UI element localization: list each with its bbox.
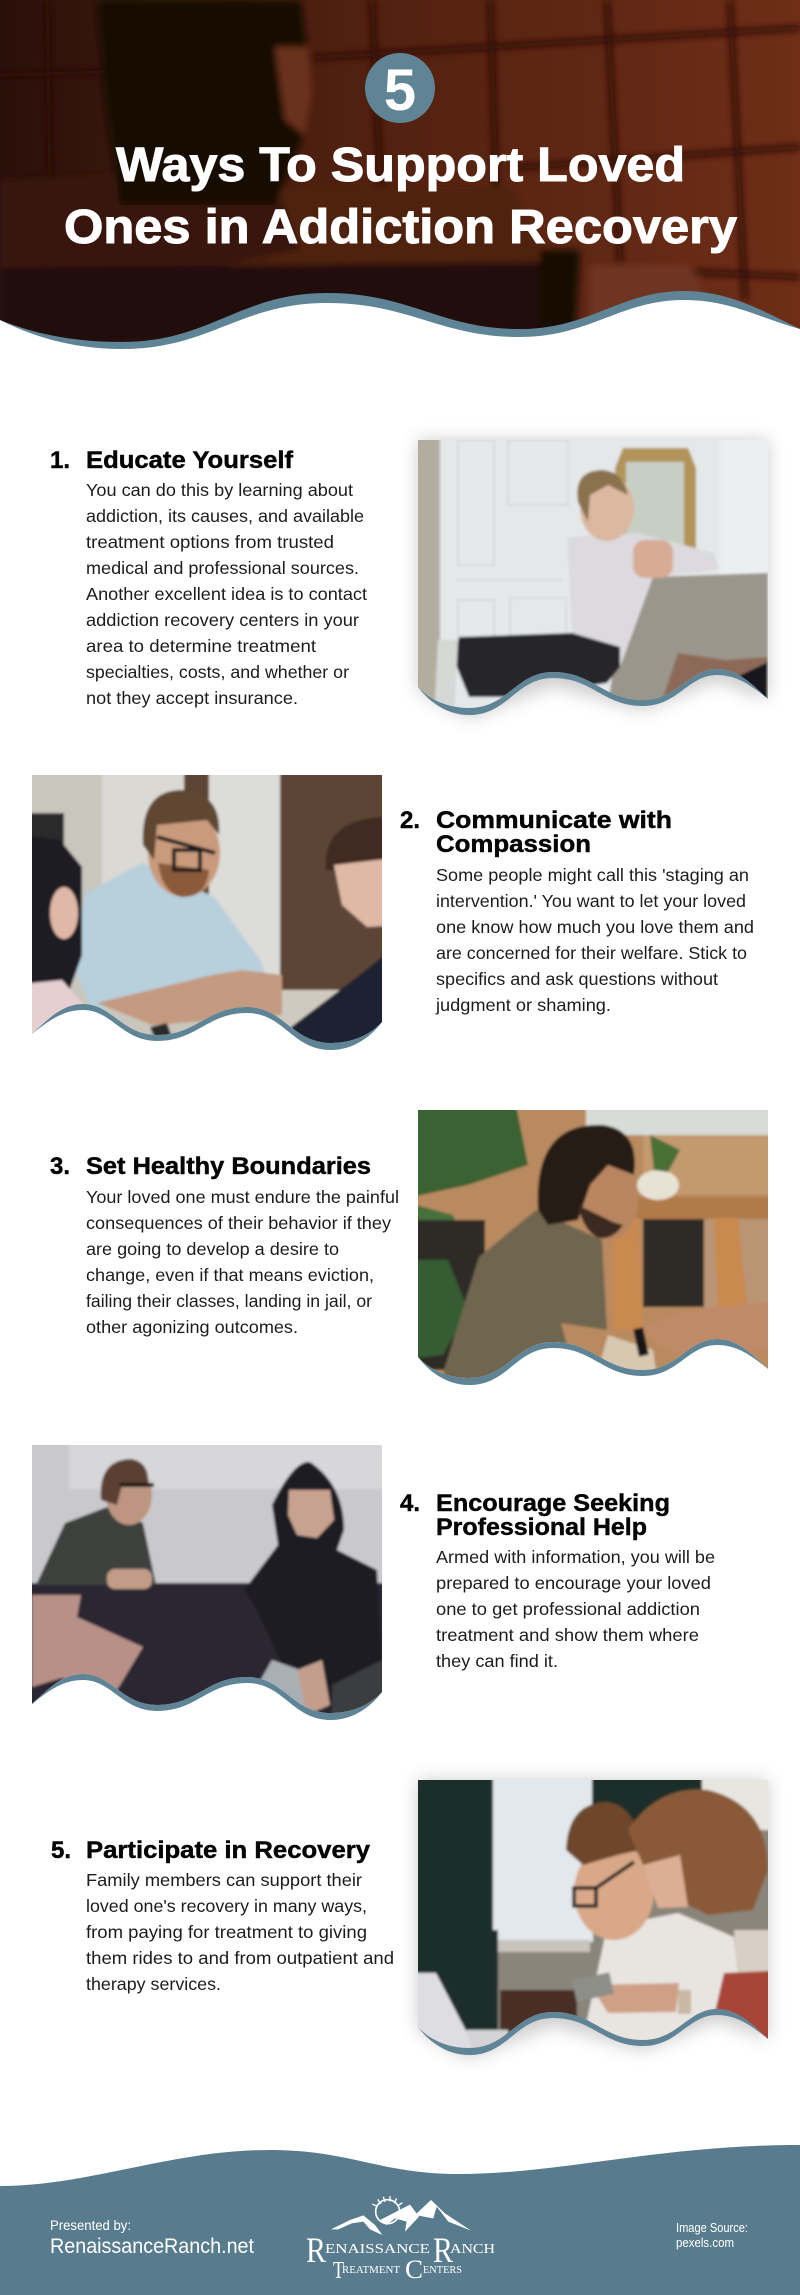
text: step 5 body: therapy services. xyxy=(86,1974,221,1994)
text: step 3 body: consequences of their behavior if they xyxy=(86,1213,391,1233)
header wave ribbon xyxy=(0,291,800,360)
header photo xyxy=(0,0,800,350)
text: step 2 body xyxy=(435,865,754,1015)
text: step 2 body: are concerned for their welfare. Stick to xyxy=(436,943,747,963)
text: step 4 body xyxy=(436,1547,715,1671)
text: image source xyxy=(676,2220,748,2250)
panel: footer xyxy=(0,2145,800,2295)
text: presented by xyxy=(50,2217,254,2258)
text: step 5 body: loved one's recovery in many ways, xyxy=(86,1896,367,1916)
text: step 2 body: intervention.' You want to let your loved xyxy=(436,891,746,911)
text: step 3 body: change, even if that means eviction, xyxy=(86,1265,374,1285)
logo wordmark: R xyxy=(306,2230,326,2270)
title xyxy=(64,139,737,254)
text: step 5 body xyxy=(86,1870,394,1994)
header white wave xyxy=(0,300,800,365)
heading: step 2 xyxy=(400,807,672,858)
text: presented by: Presented by: xyxy=(50,2217,131,2233)
heading: step 5: 5. xyxy=(51,1837,71,1864)
wave ribbon xyxy=(32,1674,382,1720)
text: step 1 body: Another excellent idea is to contact xyxy=(86,584,367,604)
text: step 4 body: they can find it. xyxy=(436,1651,558,1671)
photo: man on sofa xyxy=(410,432,776,724)
photo: man holding hands xyxy=(418,1110,768,1385)
text: image source: Image Source: xyxy=(676,2220,748,2235)
text: step 3 body: other agonizing outcomes. xyxy=(86,1317,298,1337)
logo wordmark: T xyxy=(333,2258,344,2284)
text: step 3 body xyxy=(86,1187,399,1337)
logo wordmark: R xyxy=(433,2230,453,2270)
wave ribbon xyxy=(418,669,768,715)
panel: header xyxy=(0,0,800,365)
heading: step 1: 1. xyxy=(50,447,70,474)
panel: step 4 xyxy=(32,1445,714,1720)
logo wordmark: REATMENT xyxy=(342,2264,400,2276)
text: step 4 body: treatment and show them where xyxy=(436,1625,699,1645)
text: step 2 body: judgment or shaming. xyxy=(435,995,611,1015)
heading: step 3: 3. xyxy=(50,1153,70,1180)
text: step 2 body: Some people might call this 'staging an xyxy=(436,865,749,885)
text: step 1 body: addiction, its causes, and available xyxy=(86,506,364,526)
text: step 1 body: addiction recovery centers in your xyxy=(86,610,359,630)
number badge: 5 xyxy=(384,58,416,123)
text: step 1 body: not they accept insurance. xyxy=(86,688,298,708)
photo: therapist and teen xyxy=(32,1445,382,1720)
text: step 3 body: failing their classes, landing in jail, or xyxy=(86,1291,372,1311)
wave ribbon xyxy=(418,2009,768,2055)
photo: counseling conversation xyxy=(32,775,382,1050)
text: step 5 body: them rides to and from outpatient and xyxy=(86,1948,394,1968)
logo wordmark: ANCH xyxy=(450,2242,495,2257)
heading: step 4 xyxy=(400,1490,670,1541)
text: step 1 body xyxy=(86,480,367,708)
logo wordmark: ENAISSANCE xyxy=(325,2242,430,2257)
panel: step 2 xyxy=(32,775,753,1050)
text: step 2 body: one know how much you love them and xyxy=(436,917,754,937)
title: Ways To Support Loved xyxy=(116,139,685,192)
text: presented by: RenaissanceRanch.net xyxy=(50,2234,254,2258)
text: step 1 body: medical and professional sources. xyxy=(86,558,359,578)
logo: Renaissance Ranch Treatment Centers xyxy=(306,2196,495,2284)
panel: step 5 xyxy=(52,1772,776,2064)
text: step 4 body: prepared to encourage your loved xyxy=(436,1573,711,1593)
heading: step 5: Participate in Recovery xyxy=(86,1837,371,1864)
text: image source: pexels.com xyxy=(676,2235,734,2250)
text: step 3 body: are going to develop a desire to xyxy=(86,1239,339,1259)
heading: step 2: 2. xyxy=(400,807,420,834)
footer wave background xyxy=(0,2145,800,2295)
wave ribbon xyxy=(32,1004,382,1050)
text: step 5 body: Family members can support their xyxy=(86,1870,362,1890)
icon: sun and mountains xyxy=(331,2196,471,2235)
text: step 1 body: area to determine treatment xyxy=(86,636,316,656)
heading: step 4: 4. xyxy=(400,1490,420,1517)
logo wordmark xyxy=(306,2230,495,2284)
number badge xyxy=(365,53,435,123)
text: step 3 body: Your loved one must endure the painful xyxy=(86,1187,399,1207)
logo wordmark: ENTERS xyxy=(423,2264,462,2276)
heading: step 2: Compassion xyxy=(436,831,591,858)
heading: step 4: Professional Help xyxy=(436,1514,647,1541)
text: step 2 body: specifics and ask questions without xyxy=(436,969,718,989)
logo wordmark: C xyxy=(405,2255,423,2284)
title: Ones in Addiction Recovery xyxy=(64,201,737,254)
heading: step 4: Encourage Seeking xyxy=(436,1490,670,1517)
photo: couple with credit card xyxy=(410,1772,776,2064)
text: step 1 body: specialties, costs, and whether or xyxy=(86,662,349,682)
text: step 1 body: treatment options from trusted xyxy=(86,532,334,552)
heading: step 2: Communicate with xyxy=(436,807,672,834)
text: step 1 body: You can do this by learning about xyxy=(86,480,353,500)
heading: step 3: Set Healthy Boundaries xyxy=(86,1153,371,1180)
text: step 4 body: one to get professional addiction xyxy=(436,1599,700,1619)
panel: step 3 xyxy=(50,1110,768,1385)
text: step 5 body: from paying for treatment to giving xyxy=(86,1922,367,1942)
heading: step 1: Educate Yourself xyxy=(86,447,294,474)
wave ribbon xyxy=(418,1339,768,1385)
panel: step 1 xyxy=(51,432,776,724)
text: step 4 body: Armed with information, you will be xyxy=(436,1547,715,1567)
